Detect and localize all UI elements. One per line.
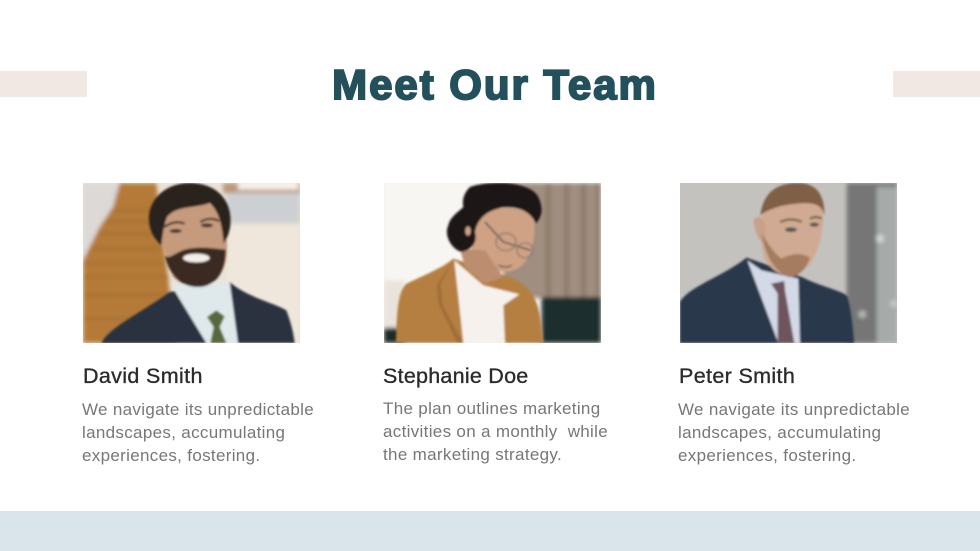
- name: Peter Smith: Peter Smith: [679, 364, 795, 388]
- photo: Stephanie Doe: [384, 183, 601, 343]
- description: Stephanie Doe: the marketing strategy.: [383, 445, 562, 464]
- name: David Smith: David Smith: [83, 364, 203, 388]
- description: Peter Smith: We navigate its unpredictable: [678, 400, 910, 419]
- description: Stephanie Doe: activities on a monthly while: [383, 422, 608, 441]
- decorative bar: left: [0, 71, 87, 97]
- name: Stephanie Doe: Stephanie Doe: [383, 364, 528, 388]
- footer band: [0, 511, 980, 551]
- description: Stephanie Doe: The plan outlines marketing: [383, 399, 600, 418]
- description: Peter Smith: experiences, fostering.: [678, 446, 856, 465]
- photo: Peter Smith: [680, 183, 897, 343]
- decorative bar: right: [893, 71, 980, 97]
- description: David Smith: We navigate its unpredictable: [82, 400, 314, 419]
- photo: David Smith: [83, 183, 300, 343]
- description: David Smith: landscapes, accumulating: [82, 423, 285, 442]
- title: Meet Our Team: [332, 61, 658, 108]
- description: David Smith: [82, 400, 314, 465]
- description: David Smith: experiences, fostering.: [82, 446, 260, 465]
- description: Stephanie Doe: [383, 399, 608, 464]
- description: Peter Smith: [678, 400, 910, 465]
- description: Peter Smith: landscapes, accumulating: [678, 423, 881, 442]
